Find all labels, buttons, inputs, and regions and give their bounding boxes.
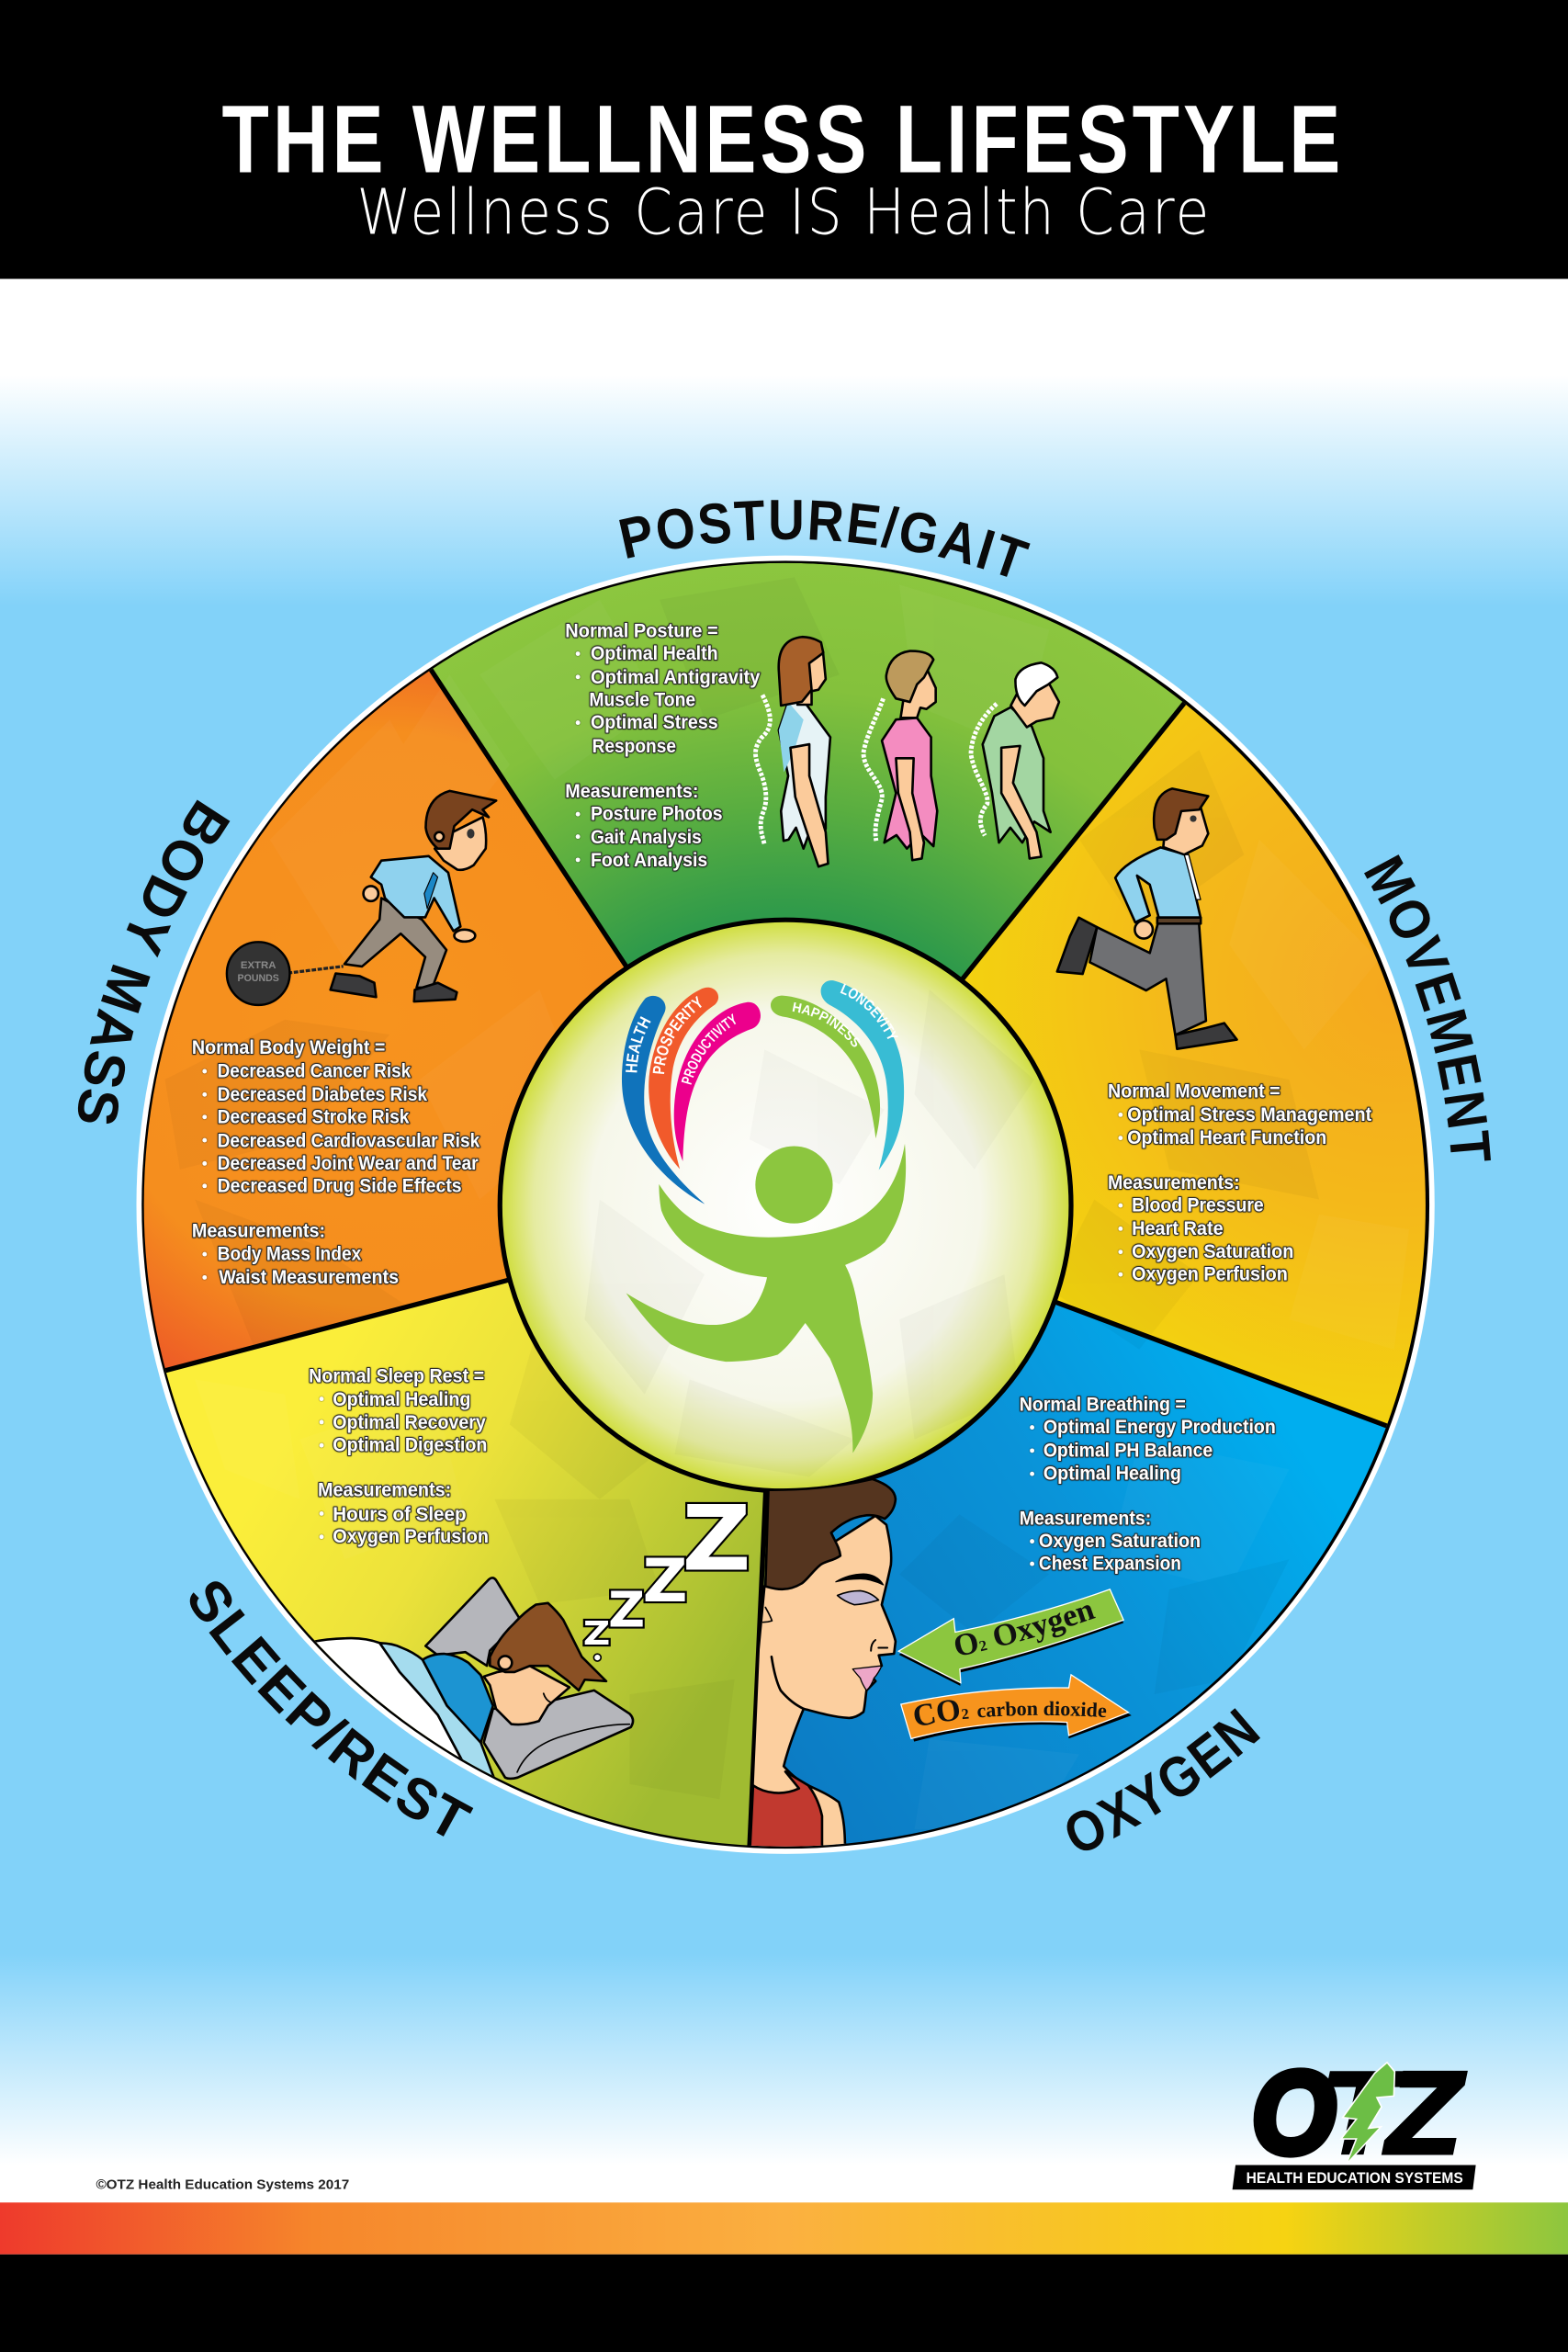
text: normal posture: Response — [592, 736, 676, 757]
wedge: movement — [964, 703, 1426, 1426]
text: normal sleep rest: Optimal Recovery — [333, 1412, 486, 1433]
text: normal sleep rest: Oxygen Perfusion — [333, 1526, 489, 1547]
panel: oxygen — [750, 1395, 1277, 1847]
ribbon labels: PRODUCTIVITY — [682, 1013, 737, 1085]
figure: man dragging weight — [331, 791, 496, 1001]
text: normal breathing — [1020, 1395, 1276, 1575]
wedge: oxygen — [750, 1305, 1387, 1847]
figure: upright posture woman — [755, 637, 830, 866]
text: normal body weight: Decreased Joint Wear and Tear — [218, 1153, 479, 1174]
heading: body mass: BODY MASS — [77, 799, 230, 1125]
figure head — [755, 1146, 833, 1224]
ribbon: longevity — [821, 980, 904, 1170]
title: THE WELLNESS LIFESTYLE — [222, 87, 1344, 194]
ribbon labels: LONGEVITY — [840, 983, 898, 1039]
text: normal body weight: Decreased Cancer Risk — [218, 1061, 411, 1082]
icon: sleeping Z letters — [583, 1487, 751, 1661]
text: normal body weight: Decreased Diabetes Risk — [218, 1084, 427, 1105]
ribbon labels: HEALTH — [626, 1016, 650, 1073]
text: normal body weight — [192, 1037, 479, 1288]
ribbon: health — [622, 996, 705, 1204]
ribbon labels: PROSPERITY — [652, 996, 702, 1074]
text: normal body weight: Normal Body Weight = — [192, 1037, 385, 1058]
text: normal posture: Optimal Antigravity — [591, 667, 761, 688]
icon: sleeping Z letters: Z — [643, 1546, 688, 1616]
text: normal posture: Posture Photos — [591, 804, 723, 825]
logo: OTZ health education systems: Z — [1383, 2047, 1466, 2177]
divider lines — [161, 669, 1387, 1848]
text: normal movement — [1108, 1081, 1371, 1285]
heading: sleep/rest: SLEEP/REST — [189, 1581, 474, 1837]
wedge: sleep — [165, 1283, 766, 1846]
text: normal sleep rest: Optimal Digestion — [333, 1435, 487, 1456]
arrow: carbon dioxide out: CO2 carbon dioxide — [915, 1700, 1106, 1725]
heading: movement: MOVEMENT — [1364, 854, 1491, 1161]
text: normal sleep rest — [309, 1366, 489, 1547]
text: normal breathing: Optimal Healing — [1043, 1464, 1181, 1485]
text: normal sleep rest: Optimal Healing — [333, 1389, 470, 1410]
text: normal posture: Gait Analysis — [591, 827, 702, 848]
text: normal movement: Oxygen Saturation — [1132, 1241, 1293, 1262]
icon: extra pounds ball and chain: EXTRA — [241, 960, 276, 971]
text: normal movement: Heart Rate — [1132, 1218, 1224, 1239]
text: normal posture: Foot Analysis — [591, 850, 707, 871]
text: normal breathing: Optimal Energy Production — [1043, 1417, 1276, 1438]
text: normal breathing: Optimal PH Balance — [1043, 1440, 1213, 1461]
centre disc — [500, 920, 1071, 1491]
panel: sleep/rest — [285, 1366, 751, 1792]
text: normal body weight: Measurements: — [192, 1220, 325, 1241]
text: normal movement: Optimal Stress Management — [1127, 1104, 1371, 1125]
ribbon labels — [626, 983, 898, 1085]
text: normal posture: Normal Posture = — [565, 621, 718, 642]
figure: running man — [1057, 788, 1237, 1049]
logo: OTZ health education systems: T — [1319, 2047, 1410, 2177]
text: normal breathing: Measurements: — [1020, 1509, 1151, 1530]
wedge: body mass — [143, 670, 625, 1371]
ribbon: happiness — [771, 996, 880, 1138]
arrow: oxygen in — [897, 1589, 1124, 1686]
arrow: oxygen in: O2 Oxygen — [955, 1605, 1096, 1656]
icon: extra pounds ball and chain — [227, 942, 344, 1005]
text: normal movement: Oxygen Perfusion — [1132, 1264, 1288, 1285]
text: normal breathing: Normal Breathing = — [1020, 1395, 1186, 1416]
figure: sleeping boy — [314, 1577, 634, 1781]
text: normal movement: Optimal Heart Function — [1127, 1127, 1326, 1148]
wedge: posture — [432, 562, 1185, 978]
icon: sleeping Z letters: Z — [608, 1581, 645, 1639]
ribbon: prosperity — [649, 988, 718, 1169]
curved section headings — [77, 500, 1491, 1850]
text: normal posture — [565, 621, 761, 871]
text: normal breathing: Chest Expansion — [1039, 1554, 1181, 1575]
footer black band — [0, 2255, 1568, 2352]
wellness wheel — [137, 556, 1435, 1854]
text: normal body weight: Body Mass Index — [218, 1244, 361, 1265]
figure: woman breathing in profile — [750, 1479, 896, 1860]
figure: stooped posture woman — [971, 662, 1059, 858]
figure body — [626, 1144, 906, 1453]
panel: movement — [1057, 788, 1371, 1285]
panel: body mass — [192, 791, 496, 1288]
panel: posture/gait — [565, 621, 1059, 871]
text: normal body weight: Decreased Stroke Risk — [218, 1106, 410, 1127]
footer colour bar — [0, 2202, 1568, 2255]
centre logo — [621, 980, 906, 1453]
ribbon: productivity — [674, 1002, 761, 1161]
copyright: ©OTZ Health Education Systems 2017 — [96, 2177, 349, 2193]
text: normal movement: Normal Movement = — [1108, 1081, 1280, 1102]
text: normal movement: Blood Pressure — [1132, 1195, 1264, 1216]
subtitle: Wellness Care IS Health Care — [356, 176, 1212, 250]
icon: extra pounds ball and chain: POUNDS — [238, 973, 279, 984]
text: normal sleep rest: Measurements: — [318, 1480, 451, 1501]
icon: lightning bolt — [1341, 2063, 1394, 2165]
icon: sleeping Z letters: Z — [682, 1487, 751, 1592]
logo: OTZ health education systems — [1233, 2047, 1476, 2189]
figure: mild forward posture woman — [863, 651, 937, 860]
logo: OTZ health education systems: HEALTH EDUCATION SYSTEMS — [1247, 2170, 1463, 2187]
arrow: carbon dioxide out — [900, 1674, 1132, 1742]
text: normal body weight: Decreased Cardiovascular Risk — [218, 1130, 479, 1151]
ribbon labels: HAPPINESS — [792, 1001, 860, 1047]
heading: oxygen: OXYGEN — [1067, 1708, 1260, 1850]
text: normal movement: Measurements: — [1108, 1172, 1240, 1193]
text: normal breathing: Oxygen Saturation — [1039, 1531, 1201, 1552]
heading: posture/gait: POSTURE/GAIT — [619, 500, 1031, 577]
text: normal posture: Measurements: — [565, 781, 698, 802]
text: normal sleep rest: Hours of Sleep — [333, 1504, 467, 1525]
header band — [0, 0, 1568, 279]
text: normal posture: Optimal Health — [591, 643, 718, 664]
text: normal posture: Muscle Tone — [589, 690, 695, 711]
text: normal sleep rest: Normal Sleep Rest = — [309, 1366, 484, 1387]
text: normal body weight: Decreased Drug Side Effects — [218, 1175, 462, 1196]
text: normal body weight: Waist Measurements — [219, 1267, 399, 1288]
text: normal posture: Optimal Stress — [591, 712, 718, 733]
logo: OTZ health education systems: O — [1252, 2047, 1336, 2177]
icon: sleeping Z letters: Z — [583, 1615, 610, 1653]
wheel outer ring — [137, 556, 1435, 1854]
